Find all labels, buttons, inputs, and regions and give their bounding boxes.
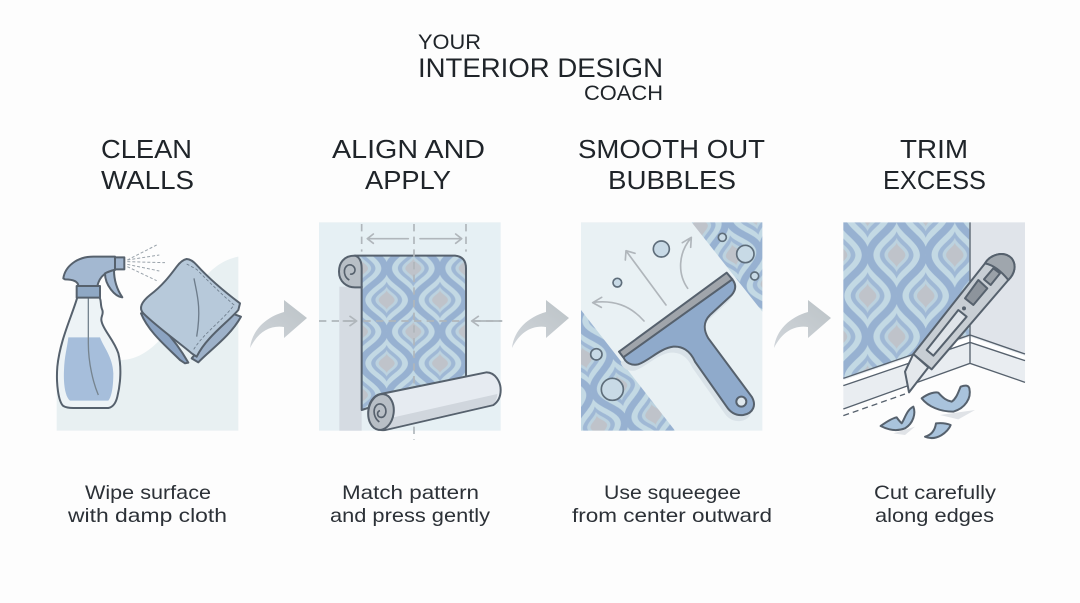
arrow: step 3 to 4: [774, 300, 831, 348]
arrow: step 2 to 3: [512, 300, 569, 348]
title: INTERIOR DESIGN: [418, 53, 663, 83]
icon: squeegee: [619, 273, 754, 421]
caption: step 1: Wipe surface: [85, 482, 211, 504]
heading: trim excess: TRIM: [900, 134, 968, 164]
heading: align and apply: APPLY: [365, 165, 451, 195]
arrow: step 1 to 2: [250, 300, 307, 348]
heading: smooth out bubbles: [578, 134, 765, 195]
icon: spray bottle: [57, 245, 165, 408]
wallpaper strip: [355, 256, 466, 410]
caption: step 3: Use squeegee: [604, 482, 741, 504]
heading: smooth out bubbles: BUBBLES: [608, 165, 736, 195]
heading: trim excess: [883, 134, 986, 195]
bottom roll: [366, 372, 501, 432]
title: [418, 31, 663, 105]
caption: step 4: along edges: [875, 505, 994, 527]
baseboard: [843, 222, 1025, 416]
panel: clean walls illustration: [57, 245, 241, 431]
patterned wall: [843, 222, 969, 378]
trimmed scraps: [881, 386, 975, 438]
caption: step 4: [874, 482, 996, 527]
caption: step 2: Match pattern: [342, 482, 479, 504]
pattern corners: [581, 222, 762, 431]
caption: step 3: from center outward: [572, 505, 772, 527]
heading: align and apply: ALIGN AND: [332, 134, 485, 164]
motion arrows: [593, 237, 691, 321]
caption: step 4: Cut carefully: [874, 482, 996, 504]
panel: trim excess illustration: [843, 222, 1025, 438]
heading: clean walls: WALLS: [101, 165, 194, 195]
heading: clean walls: [101, 134, 194, 195]
caption: step 2: [330, 482, 490, 527]
heading: clean walls: CLEAN: [101, 134, 192, 164]
side wall: [970, 222, 1025, 354]
title: COACH: [584, 82, 663, 105]
panel: smooth out bubbles illustration: [581, 222, 762, 431]
caption: step 3: [572, 482, 772, 527]
title: YOUR: [418, 31, 481, 54]
icon: cloth: [141, 259, 241, 363]
heading: align and apply: [332, 134, 485, 195]
caption: step 2: and press gently: [330, 505, 490, 527]
panel: align and apply illustration: [319, 222, 502, 440]
alignment guides: [319, 224, 502, 440]
bubbles: [591, 233, 759, 400]
icon: utility knife: [905, 254, 1015, 392]
caption: step 1: [67, 482, 227, 527]
heading: smooth out bubbles: SMOOTH OUT: [578, 134, 765, 164]
heading: trim excess: EXCESS: [883, 165, 986, 195]
top roll: [339, 256, 362, 287]
caption: step 1: with damp cloth: [67, 505, 227, 527]
